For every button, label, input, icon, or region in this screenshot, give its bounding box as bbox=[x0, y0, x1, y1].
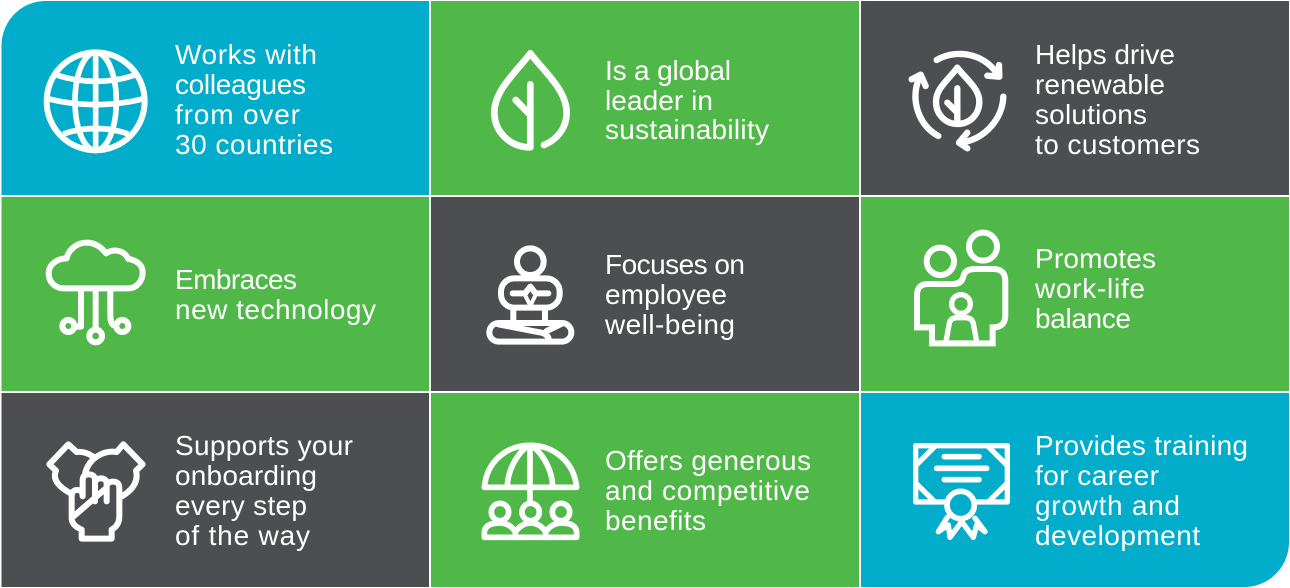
text: onboarding: Supports your bbox=[175, 430, 353, 461]
text: new technology: new technology bbox=[175, 294, 376, 325]
text: employee well-being: well-being bbox=[604, 309, 735, 340]
panel: global leader bbox=[431, 1, 859, 195]
panel: employee well-being bbox=[431, 197, 859, 391]
text: renewable solutions: Helps drive bbox=[1035, 39, 1175, 70]
text: renewable solutions: solutions bbox=[1035, 99, 1147, 130]
text: works with colleagues: 30 countries bbox=[175, 129, 333, 160]
text: work-life balance: work-life bbox=[1034, 273, 1145, 304]
icon: leaf bbox=[494, 53, 567, 147]
text: training: Provides training bbox=[1035, 430, 1248, 461]
panel: new technology bbox=[2, 197, 429, 391]
icon: family bbox=[917, 233, 1005, 343]
text: new technology: Embraces bbox=[175, 264, 297, 295]
text: new technology bbox=[175, 264, 376, 325]
text: training: for career bbox=[1035, 460, 1159, 491]
panel: benefits bbox=[431, 393, 859, 587]
text: training: development bbox=[1035, 520, 1200, 551]
text: work-life balance: balance bbox=[1035, 303, 1131, 334]
icon: certificate bbox=[916, 446, 1007, 537]
icon: umbrella over people bbox=[484, 445, 577, 537]
text: employee well-being: Focuses on bbox=[605, 249, 745, 280]
text: work-life balance bbox=[1034, 243, 1156, 334]
icon: meditating person bbox=[489, 248, 571, 342]
icon: globe bbox=[47, 52, 145, 150]
panel: work-life balance bbox=[861, 197, 1289, 391]
panel: training bbox=[861, 393, 1289, 587]
text: works with colleagues: colleagues bbox=[175, 69, 306, 100]
text: benefits: Offers generous bbox=[605, 445, 811, 476]
text: global leader: leader in bbox=[605, 85, 713, 116]
text: works with colleagues bbox=[175, 39, 333, 160]
text: renewable solutions: renewable bbox=[1035, 69, 1165, 100]
text: onboarding: of the way bbox=[175, 520, 310, 551]
text: training bbox=[1035, 430, 1248, 551]
panel: renewable solutions bbox=[861, 1, 1289, 195]
text: renewable solutions bbox=[1035, 39, 1200, 160]
text: training: growth and bbox=[1035, 490, 1180, 521]
text: employee well-being bbox=[604, 249, 745, 340]
text: employee well-being: employee bbox=[605, 279, 727, 310]
text: work-life balance: Promotes bbox=[1035, 243, 1156, 274]
text: onboarding bbox=[175, 430, 353, 551]
icon: cloud circuit bbox=[49, 243, 143, 342]
panel: onboarding bbox=[2, 393, 429, 587]
panel: works with colleagues bbox=[2, 1, 429, 195]
text: onboarding: onboarding bbox=[175, 460, 317, 491]
icon: joined hands bbox=[49, 444, 143, 539]
text: onboarding: every step bbox=[175, 490, 307, 521]
text: global leader: Is a global bbox=[605, 55, 731, 86]
text: global leader bbox=[605, 55, 769, 145]
text: works with colleagues: from over bbox=[175, 99, 300, 130]
text: works with colleagues: Works with bbox=[175, 39, 317, 70]
icon: leaf with cycle arrows bbox=[912, 54, 1003, 148]
text: benefits bbox=[605, 445, 811, 536]
text: renewable solutions: to customers bbox=[1035, 129, 1200, 160]
text: global leader: sustainability bbox=[605, 114, 769, 145]
text: benefits: and competitive bbox=[605, 475, 810, 506]
text: benefits: benefits bbox=[605, 505, 706, 536]
